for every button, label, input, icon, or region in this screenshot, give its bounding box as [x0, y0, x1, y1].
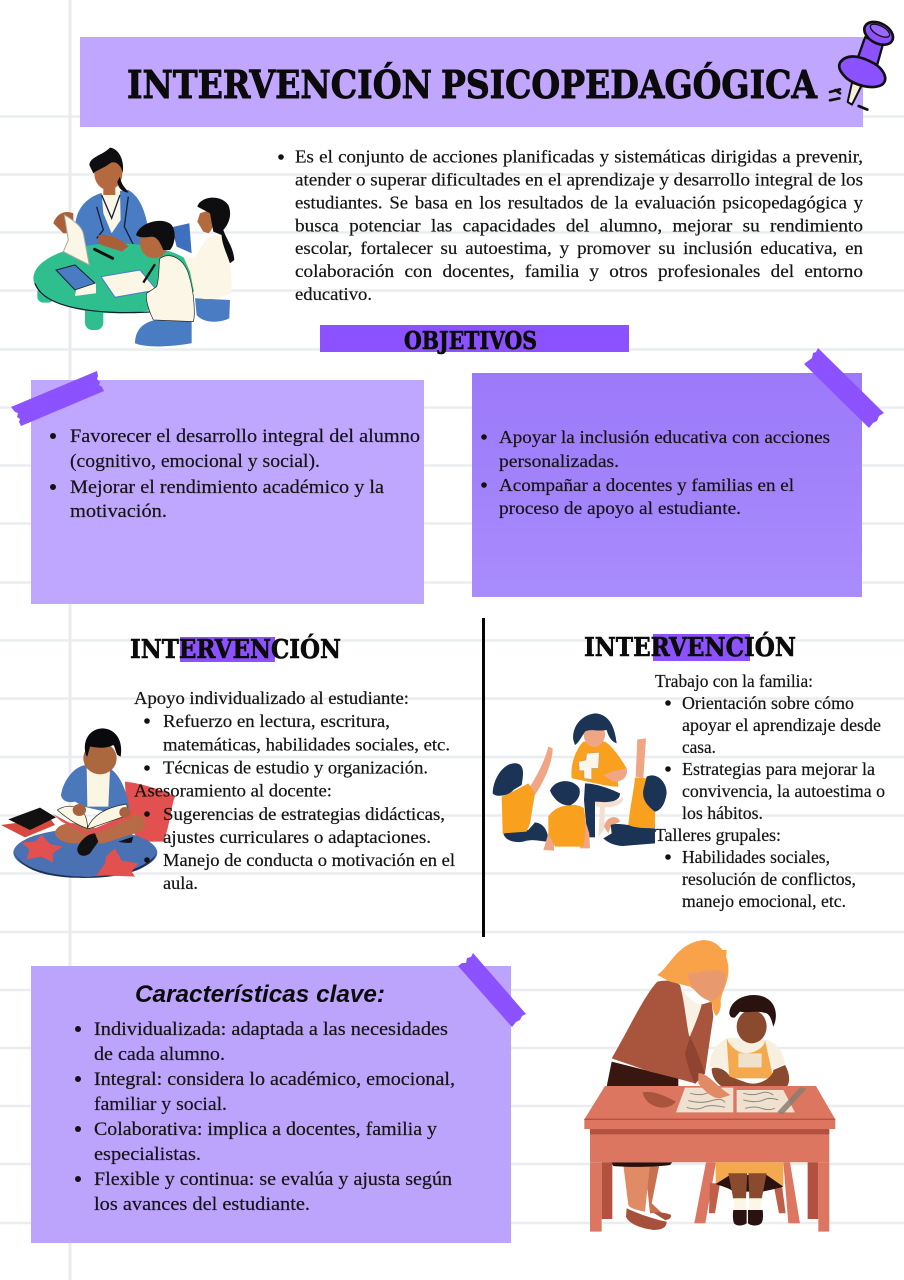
text block: family work: los hábitos. — [682, 803, 763, 823]
heading: características clave: Características clave: — [135, 981, 385, 1008]
objectives list left: (cognitivo, emocional y social). — [70, 451, 320, 472]
text block: individual support: Refuerzo en lectura, escritura, — [163, 711, 390, 731]
text block: family work: apoyar el aprendizaje desde — [682, 715, 881, 735]
characteristics list: Individualizada: adaptada a las necesidades — [94, 1019, 448, 1040]
text block: definition: estudiantes. Se basa en los resultados de la evaluación psicopedagógica y — [295, 192, 863, 212]
illustration: teacher with group of children — [493, 713, 667, 851]
text block: individual support: aula. — [163, 873, 198, 893]
text block: family work — [655, 671, 885, 911]
text block: individual support: ajustes curriculares o adaptaciones. — [163, 827, 431, 847]
objectives list right: personalizadas. — [499, 451, 619, 471]
heading: intervención right: INTERVENCIÓN — [584, 631, 796, 663]
title: INTERVENCIÓN — [127, 62, 432, 107]
text block: family work: Trabajo con la familia: — [655, 671, 813, 691]
text block: family work: resolución de conflictos, — [682, 869, 856, 889]
text block: individual support: Manejo de conducta o motivación en el — [163, 850, 455, 870]
text block: family work: manejo emocional, etc. — [682, 891, 846, 911]
text block: individual support: Sugerencias de estrategias didácticas, — [163, 804, 445, 824]
tape — [458, 953, 526, 1027]
heading: objetivos: OBJETIVOS — [404, 326, 537, 355]
characteristics list: familiar y social. — [94, 1094, 227, 1115]
objectives list left: Mejorar el rendimiento académico y la — [70, 477, 385, 498]
characteristics list — [75, 1019, 455, 1215]
heading: objetivos — [320, 325, 629, 355]
text block: individual support — [134, 688, 455, 893]
tape — [11, 371, 104, 426]
text block: definition — [278, 146, 863, 304]
text block: family work: Orientación sobre cómo — [682, 693, 854, 713]
characteristics list: los avances del estudiante. — [94, 1194, 310, 1215]
characteristics list: especialistas. — [94, 1144, 201, 1165]
objectives list right: proceso de apoyo al estudiante. — [499, 498, 741, 518]
text block: definition: escolar, fortalecer su autoestima, y promover su inclusión educativa, en — [295, 238, 863, 258]
title banner: PSICOPEDAGÓGICA — [441, 62, 817, 107]
characteristics list: Colaborativa: implica a docentes, familia y — [94, 1119, 438, 1140]
text block: definition: atender o superar dificultades en el aprendizaje y desarrollo integral de los — [295, 170, 863, 190]
text block: family work: casa. — [682, 737, 716, 757]
icon: push pin — [830, 17, 897, 110]
illustration: teacher with two students at green table — [33, 148, 234, 346]
characteristics list: de cada alumno. — [94, 1044, 225, 1065]
text block: definition: colaboración con docentes, familia y otros profesionales del entorno — [295, 261, 863, 281]
text block: definition: educativo. — [295, 284, 372, 304]
vertical divider — [482, 618, 485, 937]
text block: family work: Estrategias para mejorar la — [682, 759, 875, 779]
title banner — [80, 37, 863, 127]
objectives list left — [50, 426, 420, 522]
objectives list right — [481, 427, 830, 518]
characteristics list: Integral: considera lo académico, emocional, — [94, 1069, 455, 1090]
objectives list right: Apoyar la inclusión educativa con acciones — [499, 427, 830, 447]
text block: definition: Es el conjunto de acciones planificadas y sistemáticas dirigidas a prevenir, — [295, 146, 863, 166]
panel: objectives left — [11, 371, 424, 604]
illustration: boy reading on cushion — [1, 728, 175, 878]
text block: family work: convivencia, la autoestima o — [682, 781, 885, 801]
text block: individual support: matemáticas, habilidades sociales, etc. — [163, 734, 450, 754]
objectives list right: Acompañar a docentes y familias en el — [499, 475, 794, 495]
text block: definition: busca potenciar las capacidades del alumno, mejorar su rendimiento — [295, 216, 863, 236]
panel: objectives right — [472, 348, 884, 597]
text block: family work: Habilidades sociales, — [682, 847, 830, 867]
characteristics list: Flexible y continua: se evalúa y ajusta según — [94, 1169, 453, 1190]
heading: intervención left: INTERVENCIÓN — [130, 633, 341, 665]
text block: individual support: Asesoramiento al docente: — [134, 780, 332, 800]
objectives list left: motivación. — [70, 501, 167, 522]
objectives list left: Favorecer el desarrollo integral del alumno — [70, 426, 420, 447]
text block: family work: Talleres grupales: — [655, 825, 781, 845]
panel: key characteristics — [31, 953, 526, 1243]
tape — [804, 348, 884, 428]
illustration: teacher helping girl at desk — [584, 940, 835, 1232]
bullet — [278, 154, 284, 160]
text block: individual support: Apoyo individualizado al estudiante: — [134, 688, 409, 708]
text block: individual support: Técnicas de estudio y organización. — [163, 758, 428, 778]
